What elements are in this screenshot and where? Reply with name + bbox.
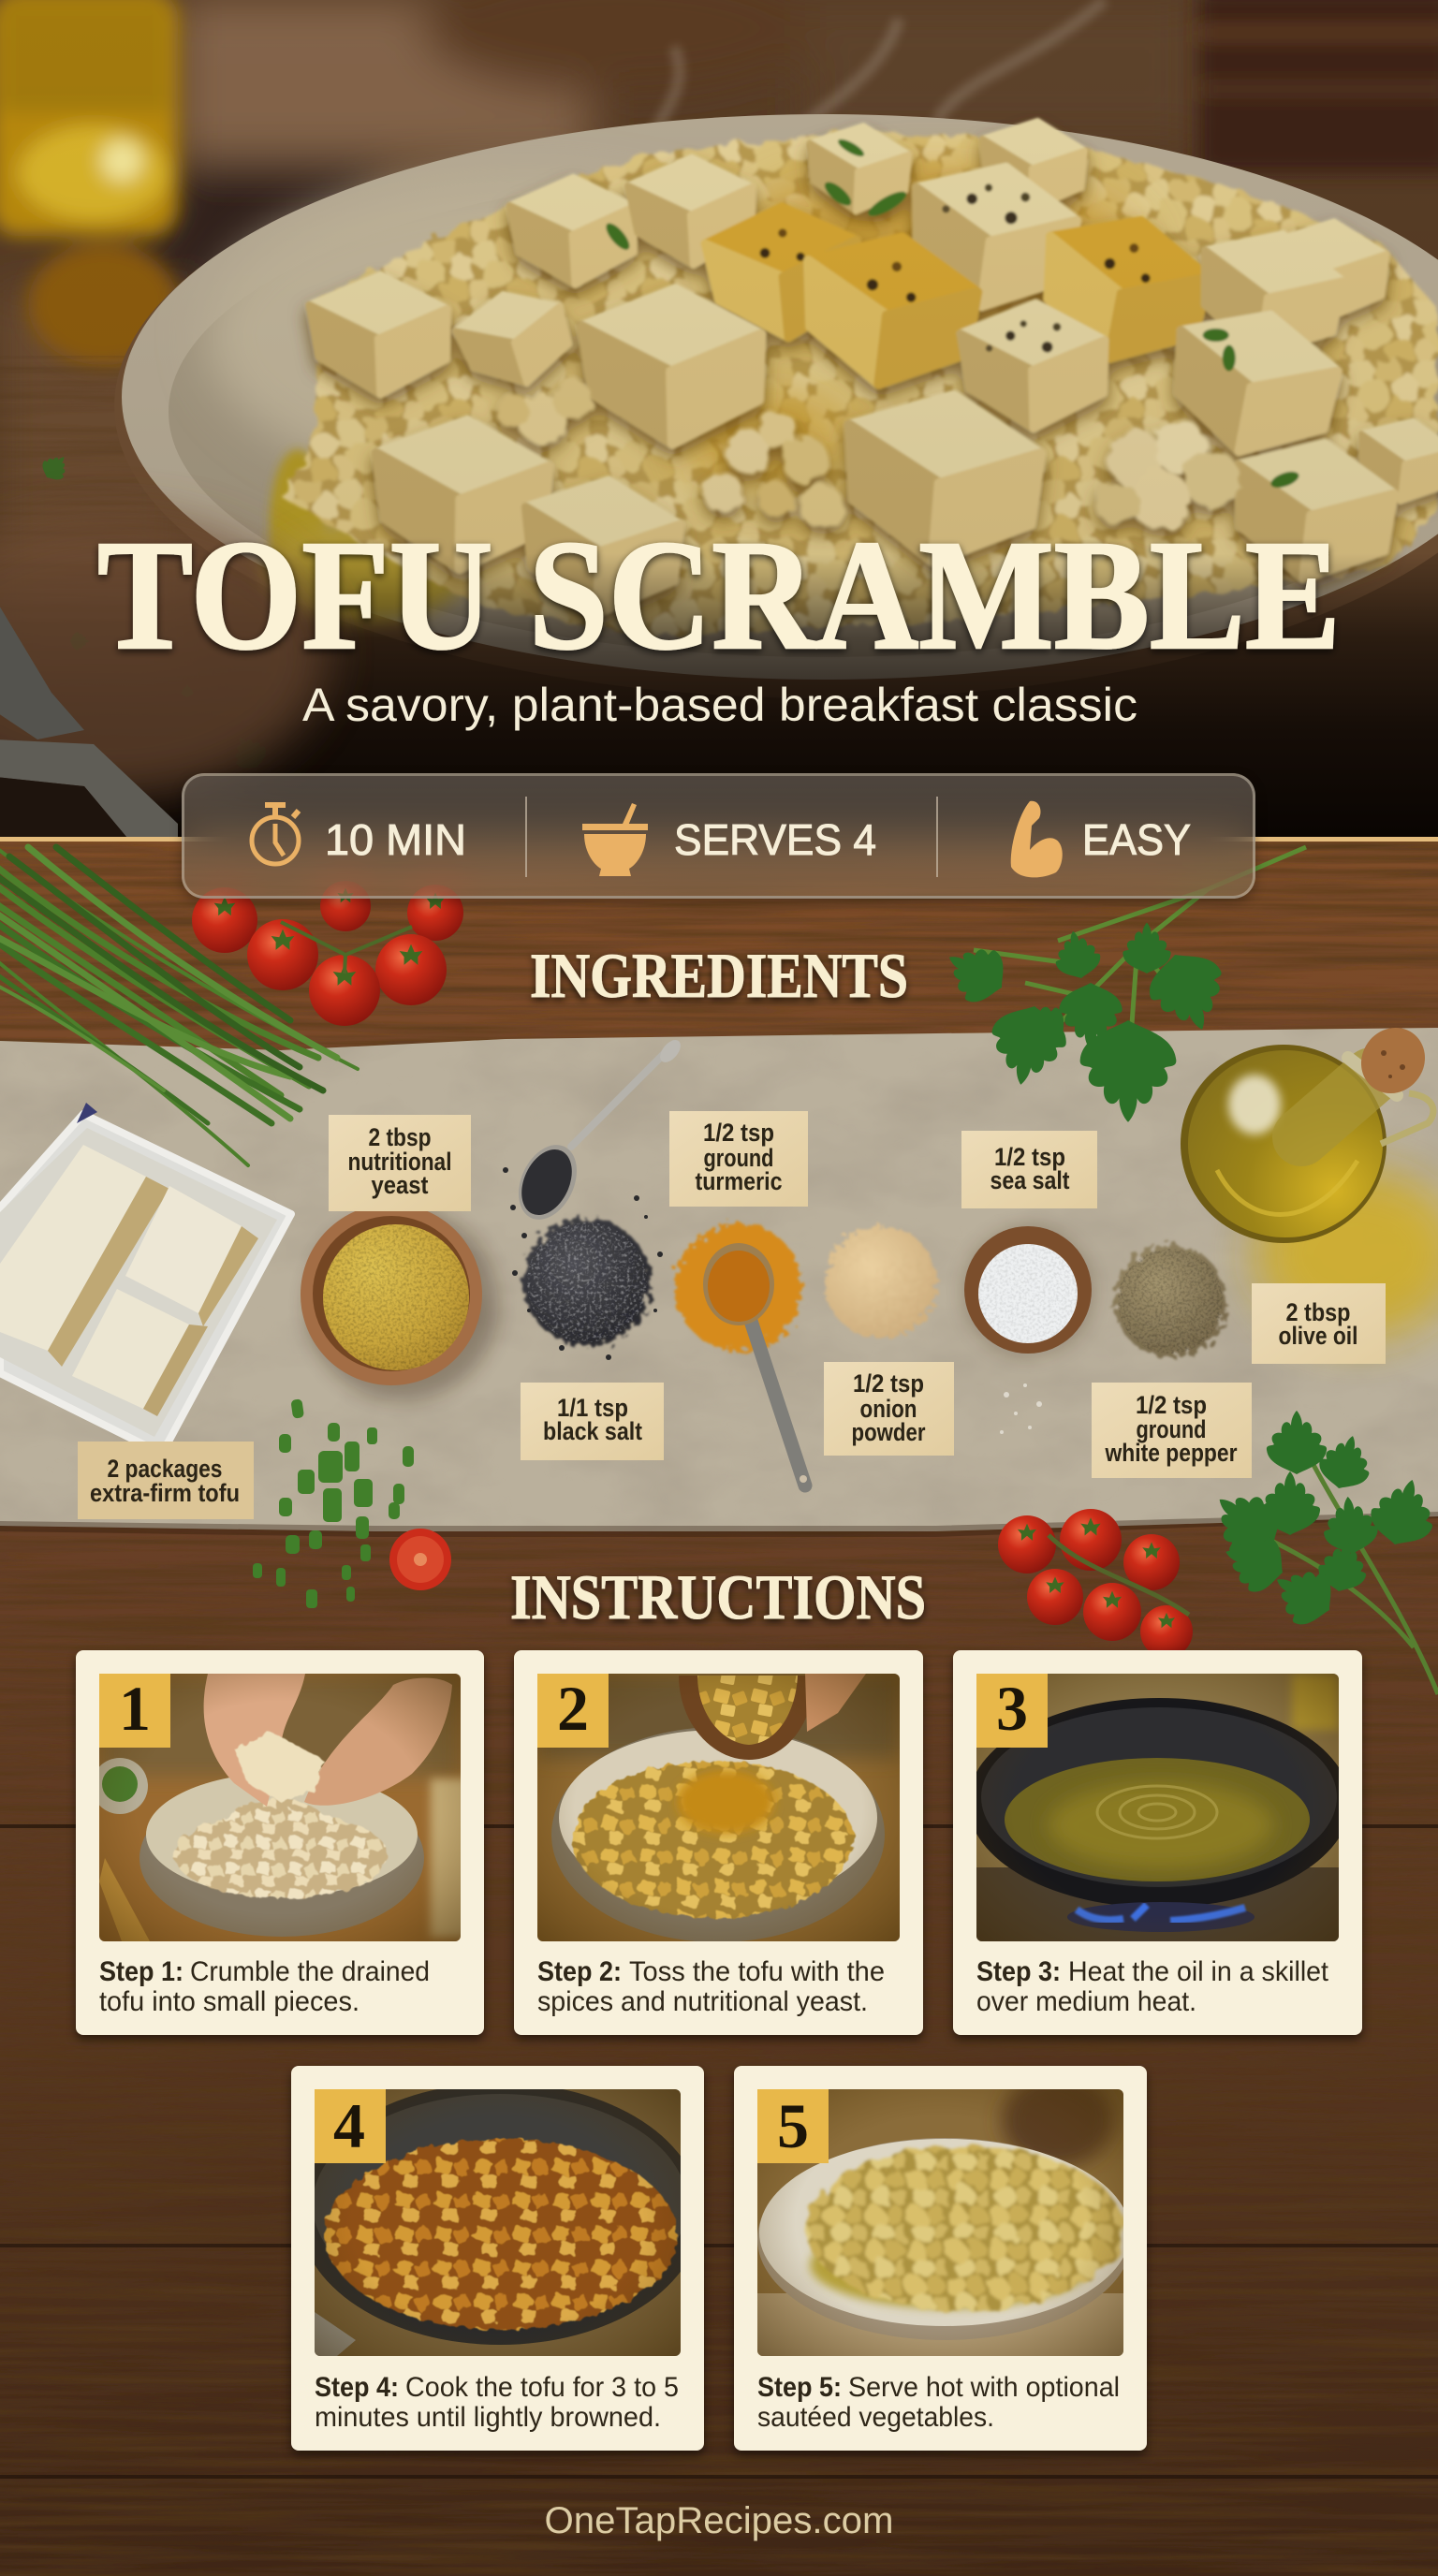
label: turmeric: turmeric [695, 1167, 783, 1195]
turmeric pile [675, 1223, 807, 1486]
step 4 text: Step 4: [315, 2372, 399, 2403]
label: sea salt: 1/2 tsp [994, 1143, 1065, 1171]
step 2 text: spices and nutritional yeast. [537, 1986, 868, 2017]
chopped chives [253, 1398, 414, 1608]
easy text: EASY [1082, 815, 1191, 864]
label: turmeric [669, 1111, 808, 1207]
subtitle: A savory, plant-based breakfast classic [302, 679, 1137, 731]
step 1 text: Crumble the drained [190, 1956, 430, 1987]
background jar [1198, 0, 1438, 173]
step 3 badge [976, 1674, 1048, 1748]
step 4 text [315, 2372, 679, 2433]
tofu package corner tab [77, 1103, 97, 1123]
footer website: OneTapRecipes.com [545, 2500, 893, 2541]
step 1 photo [92, 1674, 468, 1941]
label: nutritional yeast: 2 tbsp [369, 1123, 431, 1151]
label: black salt: black salt [543, 1417, 642, 1445]
step 3 text: Heat the oil in a skillet [1068, 1956, 1329, 1987]
10 min text: 10 MIN [325, 815, 466, 864]
parsley top right [935, 847, 1306, 1122]
step 2 photo [537, 1674, 900, 1942]
table wood texture [20, 356, 125, 453]
label: nutritional yeast: nutritional [348, 1148, 451, 1176]
label: turmeric: ground [704, 1144, 773, 1172]
plate [114, 114, 1438, 698]
label: white pepper: white pepper [1105, 1439, 1238, 1467]
label: sea salt: sea salt [990, 1166, 1070, 1194]
step 4 photo [299, 2083, 701, 2356]
hero dark fade [0, 0, 1438, 839]
chives bundle [0, 847, 358, 1165]
tomatoes bottom [998, 1509, 1193, 1658]
step 3 text: over medium heat. [976, 1986, 1196, 2017]
spoon with black salt [507, 1036, 684, 1229]
label: black salt: 1/1 tsp [557, 1394, 628, 1422]
step 3 text [976, 1956, 1329, 2017]
parsley bottom right [1198, 1411, 1438, 1694]
gold divider [0, 837, 1438, 842]
label: tofu: 2 packages [107, 1455, 223, 1483]
divider [936, 797, 938, 877]
step 5 text: Step 5: [757, 2372, 842, 2403]
onion powder pile [825, 1226, 937, 1339]
step 2 text: Toss the tofu with the [629, 1956, 885, 1987]
label: nutritional yeast: yeast [371, 1171, 429, 1199]
stats pill [182, 773, 1255, 899]
serves text: SERVES 4 [674, 815, 876, 864]
step 5 number: 5 [777, 2090, 809, 2161]
label: olive oil: 2 tbsp [1286, 1298, 1350, 1326]
tofu package [0, 1114, 291, 1454]
label: onion powder: onion [859, 1395, 917, 1423]
label: onion powder: 1/2 tsp [853, 1369, 924, 1398]
label: turmeric: 1/2 tsp [703, 1119, 774, 1147]
title: TOFU SCRAMBLE [97, 508, 1341, 682]
step 3 text: Step 3: [976, 1956, 1061, 1987]
step 5 text: sautéed vegetables. [757, 2402, 994, 2433]
scrambled tofu pile [281, 121, 1438, 637]
label: white pepper [1092, 1383, 1252, 1478]
label: sea salt [961, 1131, 1097, 1208]
label: tofu [78, 1442, 254, 1519]
salt bowl [963, 1226, 1093, 1356]
step 3 photo [968, 1674, 1350, 1942]
labels [78, 1111, 1386, 1519]
step 5 badge [757, 2089, 829, 2163]
card shadows [76, 1655, 1362, 2455]
left table lift [0, 515, 328, 796]
white pepper pile [1114, 1245, 1226, 1357]
label: olive oil [1252, 1283, 1386, 1364]
icon: stopwatch [252, 805, 299, 864]
label: tofu: extra-firm tofu [90, 1479, 240, 1507]
spilled salt [1000, 1383, 1042, 1434]
label: onion powder [824, 1362, 954, 1456]
step 4 card [291, 2066, 704, 2451]
black salt pile [503, 1167, 663, 1360]
background glass of oil [0, 0, 178, 365]
steam [651, 0, 1108, 123]
olive oil bottle [1181, 1016, 1438, 1243]
step 2 number: 2 [557, 1673, 589, 1744]
label: nutritional yeast [329, 1115, 471, 1211]
step 1 badge [99, 1674, 170, 1748]
step 1 card [76, 1650, 484, 2035]
hero food photo [0, 0, 1438, 842]
fork [0, 599, 178, 842]
step 2 text: Step 2: [537, 1956, 622, 1987]
oil glow [1255, 1170, 1438, 1339]
label: black salt [521, 1383, 664, 1460]
step 4 text: Cook the tofu for 3 to 5 [405, 2372, 679, 2403]
step 5 text [757, 2372, 1120, 2433]
tomatoes top [192, 881, 463, 1026]
step 3 number: 3 [996, 1673, 1028, 1744]
step 5 photo [757, 2073, 1132, 2359]
step 2 card [514, 1650, 923, 2035]
linen cloth [0, 1028, 1438, 1537]
instructions heading: INSTRUCTIONS [510, 1561, 926, 1632]
step 5 card [734, 2066, 1147, 2451]
icon: bowl [582, 803, 648, 876]
step 2 text [537, 1956, 885, 2017]
step 4 number: 4 [333, 2090, 365, 2161]
step 1 number: 1 [119, 1673, 151, 1744]
wood table background [0, 837, 1438, 2576]
step 5 text: Serve hot with optional [848, 2372, 1120, 2403]
step 1 text: tofu into small pieces. [99, 1986, 360, 2017]
step 4 text: minutes until lightly browned. [315, 2402, 661, 2433]
label: white pepper: 1/2 tsp [1136, 1391, 1207, 1419]
label: onion powder: powder [852, 1418, 926, 1446]
step 3 card [953, 1650, 1362, 2035]
step 1 text: Step 1: [99, 1956, 183, 1987]
divider [525, 797, 527, 877]
label: olive oil: olive oil [1279, 1322, 1357, 1350]
step 4 badge [315, 2089, 386, 2163]
cut tomato [389, 1529, 451, 1590]
label: white pepper: ground [1137, 1415, 1206, 1443]
ingredients heading: INGREDIENTS [530, 940, 908, 1011]
icon: flexed arm [1011, 801, 1063, 877]
step 1 text [99, 1956, 430, 2017]
bowl nutritional yeast [301, 1204, 498, 1400]
step 2 badge [537, 1674, 609, 1748]
scattered herbs [37, 448, 271, 776]
